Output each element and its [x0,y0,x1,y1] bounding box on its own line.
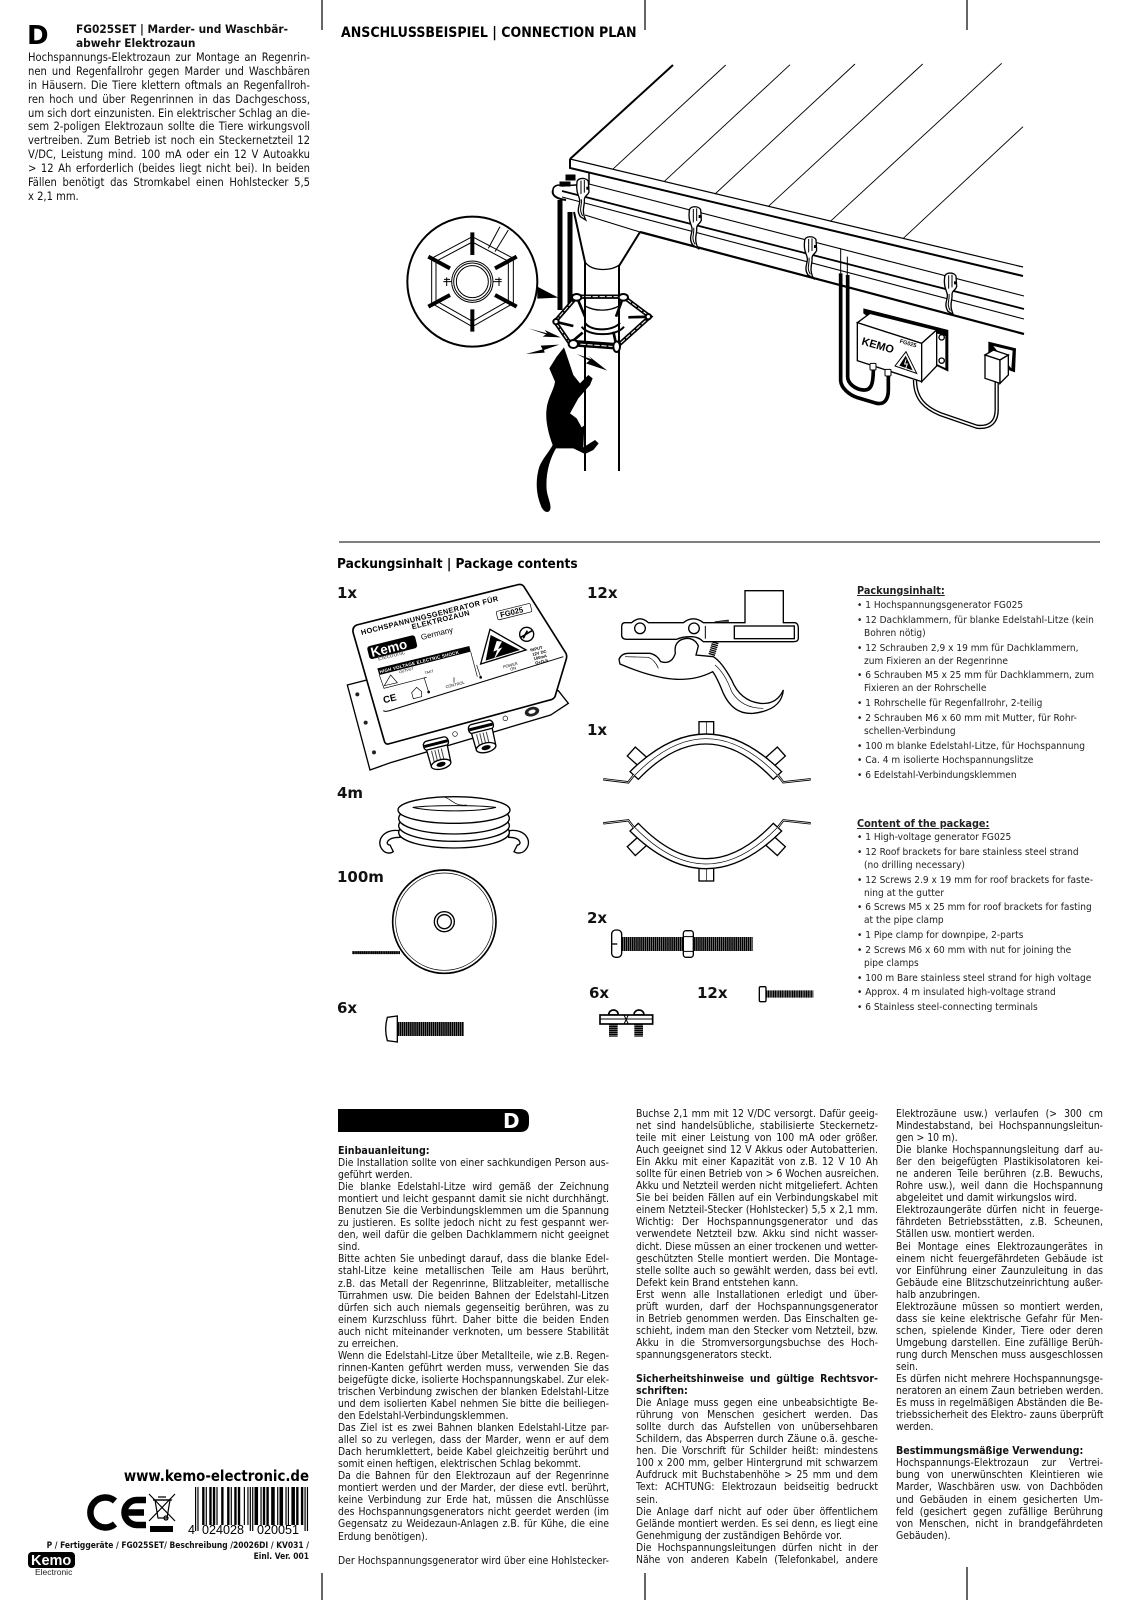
crop marks [322,0,967,1600]
text column 2: power supply and safety notes: prüft wurden, darf der Hochspannungsgenerator [636,1301,878,1313]
footer reference [47,1540,309,1560]
text column 3: safety notes and intended use: Umgebung darstellen. Eine zufällige Berüh- [896,1337,1103,1349]
text column 1: Einbauanleitung: Das Ziel ist es zwei Bahnen blanken Edelstahl-Litze par- [338,1422,609,1434]
box lettering: KEMO [860,336,896,356]
text column 1: Einbauanleitung: des Hochspannungsgenerators nicht geerdet werden (im [338,1506,609,1518]
text column 2: power supply and safety notes: hen. Die Vorschrift für Schilder heißt: mindestens [636,1445,878,1457]
heading: product marker D: D [27,21,49,51]
generator device: HOCHSPANNUNGSGENERATOR FÜR [360,594,500,637]
heading: product title: abwehr Elektrozaun [76,36,195,50]
text column 2: power supply and safety notes: stelle sollte auch so gewählt werden, dass bei evtl. [636,1265,878,1277]
text column 2: power supply and safety notes: Die Anlage darf nicht auf oder über öffentlichem [636,1506,878,1518]
generator device [347,584,568,772]
generator device: FG025 [499,605,525,620]
text column 1: Einbauanleitung: und dem isolierten Kabel nehmen Sie bitte die beiliegen- [338,1398,609,1410]
generator device: TAKT [424,669,435,675]
list: Packungsinhalt (German): schellen-Verbindung [864,726,956,737]
text column 3: safety notes and intended use: Elektrozäune usw.) verlaufen (> 300 cm [896,1108,1103,1120]
generator device: Germany [420,625,454,642]
text column 1: Einbauanleitung: z.B. das Metall der Regenrinne, Blitzableiter, metallische [338,1278,609,1290]
list: Content of the package (English): Content of the package: [857,817,989,830]
text column 1: Einbauanleitung: Bitte achten Sie unbedingt darauf, dass die blanke Edel- [338,1253,609,1265]
barcode [188,1487,308,1537]
detail circle [407,217,558,347]
text column 2: power supply and safety notes: net sind handelsübliche, stabilisierte Steckernetz- [636,1120,878,1132]
text column 3: safety notes and intended use: bung von unerwünschten Kleintieren wie [896,1469,1103,1481]
text column 3: safety notes and intended use: halb anzubringen. [896,1289,980,1301]
text column 3: safety notes and intended use: schen, spielende Kinder, Tiere oder deren [896,1325,1103,1337]
barcode: 4 [188,1523,195,1537]
text column 3: safety notes and intended use: einem nicht feuergefährdeten Gebäude ist [896,1253,1103,1265]
Kemo logo: Electronic [35,1567,73,1577]
text column 3: safety notes and intended use: Es muss in regelmäßigen Abständen die Be- [896,1397,1103,1409]
quantity labels: 1x [337,584,357,602]
screw M6 with nut [612,930,753,957]
list: Content of the package (English): • 2 Screws M6 x 60 mm with nut for joining the [857,945,1071,956]
list: Packungsinhalt (German): • 12 Dachklammern, für blanke Edelstahl-Litze (kein [857,615,1094,626]
text column 1: Einbauanleitung: den, weil dafür die gelben Dachklammern nicht geeignet [338,1229,609,1241]
text column 3: safety notes and intended use: Rohre usw.), weil dann die Hochspannung [896,1180,1103,1192]
text column 1: Einbauanleitung: montiert und leicht gespannt damit sie nicht durchhängt. [338,1193,609,1205]
Kemo logo [28,1552,75,1577]
list: Packungsinhalt (German): Packungsinhalt: [857,584,945,597]
text column 3: safety notes and intended use: neratoren an einem Zaun betrieben werden. [896,1385,1103,1397]
generator device: CE [382,692,398,706]
list: Content of the package (English): • 6 Stainless steel-connecting terminals [857,1002,1038,1013]
text column 2: power supply and safety notes: Auch geeignet sind 12 V Akkus oder Autobatterien. [636,1144,878,1156]
heading: product title: FG025SET | Marder- und Waschbär- [76,22,288,36]
list: Packungsinhalt (German): • 6 Edelstahl-Verbindungsklemmen [857,770,1017,781]
text block: product description: V/DC, Leistung mind. 100 mA oder ein 12 V Autoakku [28,148,310,161]
list: Packungsinhalt (German): • 12 Schrauben 2,9 x 19 mm für Dachklammern, [857,643,1078,654]
text column 2: power supply and safety notes: Die Hochspannungsleitungen dürfen nicht in der [636,1542,878,1554]
text column 2: power supply and safety notes: sein. [636,1494,658,1506]
text column 3: safety notes and intended use: Bestimmungsmäßige Verwendung: [896,1445,1083,1457]
list: Packungsinhalt (German): zum Fixieren an der Regenrinne [864,656,1008,667]
text block: product description: in Häusern. Die Tiere klettern oftmals an Regenfallroh- [28,79,310,92]
text column 1: Einbauanleitung: allel so zu verlegen, dass der Marder, wenn er auf dem [338,1434,609,1446]
text column 1: Einbauanleitung: trischen Verbindung zwischen der blanken Edelstahl-Litze [338,1386,609,1398]
footer reference: Einl. Ver. 001 [254,1550,309,1560]
text column 1: Einbauanleitung: Türrahmen usw. Die beiden Bahnen der Edelstahl-Litzen [338,1290,609,1302]
text block: product description: Hochspannungs-Elektrozaun zur Montage an Regenrin- [28,51,310,64]
text column 2: power supply and safety notes: schieht, indem man den Stecker vom Netzteil, bzw. [636,1325,878,1337]
panel: package contents drawings [347,584,813,1042]
text column 1: Einbauanleitung: montiert werden und der Marder, der diese evtl. berührt, [338,1482,609,1494]
text column 3: safety notes and intended use: sein. [896,1361,918,1373]
text column 2: power supply and safety notes: sollte für einen Betrieb von > 6 Wochen ausreichen. [636,1168,879,1180]
quantity labels: 12x [697,984,728,1002]
text column 2: power supply and safety notes: Nähe von anderen Kabeln (Telefonkabel, andere [636,1554,878,1566]
pipe clamp upper half [603,722,811,782]
text column 2: power supply and safety notes: sollte durch das Aufstellen von unübersehbaren [636,1421,878,1433]
WEEE symbol [149,1494,175,1532]
quantity labels: 4m [337,784,363,802]
text column 2: power supply and safety notes: einem Netzteil-Stecker (Hohlstecker) 5,5 x 2,1 mm. [636,1204,878,1216]
text column 3: safety notes and intended use: abgeleitet und damit wirkungslos wird. [896,1192,1077,1204]
generator device: HIGH VOLTAGE ELECTRIC SHOCK [379,650,460,674]
list: Content of the package (English): • 1 High-voltage generator FG025 [857,832,1011,843]
text column 3: safety notes and intended use: feld (gesichert gegen zufällige Berührung [896,1506,1103,1518]
text column 3: safety notes and intended use: triebssicherheit des Elektro- zauns überprüft [896,1409,1104,1421]
text column 1: Einbauanleitung: beigefügte dicke, isolierte Hochspannungskabel. Zur elek- [338,1374,609,1386]
text block: product description: Fällen benötigt das Stromkabel einen Hohlstecker 5,5 [28,176,310,189]
generator device: 100mA [533,653,547,661]
quantity labels: 2x [587,909,607,927]
list: Content of the package (English): pipe clamps [864,958,919,969]
text column 1: Einbauanleitung: Einbauanleitung: [338,1145,430,1157]
text column 1: Einbauanleitung: dürfen sich auch niemals gegenseitig berühren, was zu [338,1302,609,1314]
footer reference: P / Fertiggeräte / FG025SET/ Beschreibung /20026DI / KV031 / [47,1540,309,1550]
roof bracket [619,591,798,713]
text column 1: Einbauanleitung: zu justieren. Es sollte jedoch nicht zu fest gespannt wer- [338,1217,609,1229]
text column 3: safety notes and intended use: Elektrozaungeräte dürfen nicht in feuerge- [896,1204,1103,1216]
list: Content of the package (English): • 12 Roof brackets for bare stainless steel strand [857,847,1079,858]
generator device: INPUT [530,645,543,653]
list: Packungsinhalt (German): • 6 Schrauben M5 x 25 mm für Dachklammern, zum [857,670,1094,681]
website URL: www.kemo-electronic.de [124,1468,309,1485]
quantity labels: 6x [589,984,609,1002]
text column 1: Einbauanleitung: Erdung benötigen). [338,1530,428,1542]
list: Packungsinhalt (German): • 1 Rohrschelle für Regenfallrohr, 2-teilig [857,698,1042,709]
text column 1: Einbauanleitung: stahl-Litze keine metallischen Teile am Haus berührt, [338,1265,609,1277]
roof clips [577,178,957,315]
list: Packungsinhalt (German) [857,584,1094,781]
text column 1: Einbauanleitung: Die Installation sollte von einer sachkundigen Person aus- [338,1157,609,1169]
text column 2: power supply and safety notes: verwendete Netzteil bzw. Akku sind nicht wasser- [636,1228,878,1240]
text column 2: power supply and safety notes: Text: ACHTUNG: Elektrozaun beidseitig bedruckt [636,1481,878,1493]
text column 3: safety notes and intended use: Mindestabstand, bei Hochspannungsleitun- [896,1120,1103,1132]
text column 1: Einbauanleitung: einem Kurzschluss führt. Daher bitte die beiden Enden [338,1314,609,1326]
generator device: ELEKTROZAUN [411,608,471,631]
text column 3: safety notes and intended use: Elektrozäune müssen so montiert werden, [896,1301,1103,1313]
barcode: 024028 [202,1523,244,1537]
text column 3: safety notes and intended use: Ställen usw. montiert werden. [896,1228,1035,1240]
text column 3: safety notes and intended use [896,1108,1104,1542]
text column 3: safety notes and intended use: fährdeten Betriebsstätten, z.B. Scheunen, [896,1216,1103,1228]
text block: product description [28,51,310,203]
list: Content of the package (English): ning at the gutter [864,888,944,899]
list: Content of the package (English) [857,817,1093,1013]
illustration: connection plan [407,63,1024,512]
text block: product description: > 12 Ah erforderlich (beides liegt nicht bei). In beiden [28,162,310,175]
stainless steel strand spool [352,870,496,973]
list: Packungsinhalt (German): Bohren nötig) [864,628,926,639]
box lettering [860,336,917,356]
list: Content of the package (English): • 6 Screws M5 x 25 mm for roof brackets for fasting [857,902,1092,913]
insulated strand coil [380,797,528,853]
text column 1: Einbauanleitung: Gegensatz zu Weidezaun-Anlagen z.B. für Kühe, die eine [338,1518,609,1530]
text column 2: power supply and safety notes: Die Anlage muss gegen eine unbeabsichtigte Be- [636,1397,878,1409]
text column 2: power supply and safety notes: Aufdruck mit Buchstabenhöhe > 25 mm und dem [636,1469,878,1481]
text column 3: safety notes and intended use: Bei Montage eines Elektrozaungerätes in [896,1241,1103,1253]
wire frame around the pipe [553,294,651,352]
text column 1: Einbauanleitung: den Edelstahl-Verbindungsklemmen. [338,1410,508,1422]
text column 3: safety notes and intended use: vor Einführung einer Zaunzuleitung in das [896,1265,1103,1277]
text column 3: safety notes and intended use: und Gebäuden in einem gesicherten Um- [896,1494,1103,1506]
text column 2: power supply and safety notes: dicht. Diese müssen an einer trockenen und wetter- [636,1241,878,1253]
generator device: Kemo [369,636,409,660]
text column 1: Einbauanleitung: Wenn die Edelstahl-Litze über Metallteile, wie z.B. Regen- [338,1350,609,1362]
text column 2: power supply and safety notes: geschützten Stelle montiert werden. Die Montage- [636,1253,878,1265]
text block: product description: um sich dort einzunisten. Ein elektrischer Schlag an die- [28,107,310,120]
Kemo logo: Kemo [31,1553,71,1569]
text column 1: Einbauanleitung: auch nicht miteinander verknoten, um bessere Stabilität [338,1326,609,1338]
text column 2: power supply and safety notes: Buchse 2,1 mm mit 12 V/DC versorgt. Dafür geeig- [636,1108,878,1120]
text column 3: safety notes and intended use: gen > 10 m). [896,1132,958,1144]
heading: product title [76,22,288,50]
language tab: D: D [503,1109,520,1133]
text column 1: Einbauanleitung: zu erreichen. [338,1338,399,1350]
text column 1: Einbauanleitung: Die blanke Edelstahl-Litze wird gemäß der Zeichnung [338,1181,609,1193]
barcode: 020051 [257,1523,299,1537]
text column 2: power supply and safety notes: Sicherheitshinweise und gültige Rechtsvor- [636,1373,878,1385]
list: Content of the package (English): • 12 Screws 2.9 x 19 mm for roof brackets for faste- [857,875,1093,886]
text column 3: safety notes and intended use: rung durch Menschen muss ausgeschlossen [896,1349,1103,1361]
text column 2: power supply and safety notes: Akku in die Stromversorgungsbuchse des Hoch- [636,1337,878,1349]
list: Packungsinhalt (German): • 1 Hochspannungsgenerator FG025 [857,600,1023,611]
quantity labels: 100m [337,868,384,886]
text column 1: Einbauanleitung: geführt werden. [338,1169,413,1181]
text column 2: power supply and safety notes: Genehmigung der zuständigen Behörde vor. [636,1530,842,1542]
text column 3: safety notes and intended use: Hochspannungs-Elektrozaun zur Vertrei- [896,1457,1103,1469]
text column 1: Einbauanleitung: Der Hochspannungsgenerator wird über eine Hohlstecker- [338,1555,609,1567]
quantity labels: 12x [587,584,618,602]
roof [570,63,1023,276]
text column 3: safety notes and intended use: dass sie keine elektrische Gefahr für Men- [896,1313,1103,1325]
quantity labels [337,584,728,1017]
downpipe [574,212,640,471]
pipe clamp lower half [603,820,811,881]
text column 1: Einbauanleitung: Dach herumklettert, beide Kabel gleichzeitig berührt und [338,1446,609,1458]
marten silhouette with sparks [526,328,607,512]
list: Packungsinhalt (German): Fixieren an der Rohrschelle [864,683,986,694]
text column 3: safety notes and intended use: Die blanke Hochspannungsleitung darf au- [896,1144,1103,1156]
text column 3: safety notes and intended use: Gebäude eine Blitzschutzeinrichtung außer- [896,1277,1103,1289]
screw M5 x 25 [386,1016,464,1042]
list: Content of the package (English): (no drilling necessary) [864,860,965,871]
list: Packungsinhalt (German): • 100 m blanke Edelstahl-Litze, für Hochspannung [857,741,1085,752]
text column 1: Einbauanleitung: somit einen heftigen, elektrischen Schlag bekommt. [338,1458,581,1470]
text column 1: Einbauanleitung: sind. [338,1241,360,1253]
text column 3: safety notes and intended use: Es dürfen nicht mehrere Hochspannungsge- [896,1373,1103,1385]
connecting terminal [600,1010,653,1037]
text column 2: power supply and safety notes: 100 x 200 mm, gelber Hintergrund mit schwarzem [636,1457,878,1469]
language tab: D [338,1109,529,1133]
gutter [553,172,1024,334]
list: Content of the package (English): • 1 Pipe clamp for downpipe, 2-parts [857,930,1023,941]
generator device: OUTPUT [399,667,415,674]
text column 2: power supply and safety notes: Wichtig: Der Hochspannungsgenerator und das [636,1216,878,1228]
heading: package contents: Packungsinhalt | Package contents [337,556,578,572]
text column 2: power supply and safety notes: Ein Akku mit einer Kapazität von z.B. 12 V 10 Ah [636,1156,878,1168]
list: Content of the package (English): • Approx. 4 m insulated high-voltage strand [857,987,1056,998]
high-voltage wires at the pipe [560,200,570,310]
text column 1: Einbauanleitung: rinnen-Kanten geführt werden muss, verwenden Sie das [338,1362,609,1374]
text block: product description: vertreiben. Zum Betrieb ist noch ein Steckernetzteil 12 [28,134,310,147]
list: Packungsinhalt (German): • 2 Schrauben M6 x 60 mm mit Mutter, für Rohr- [857,713,1077,724]
text column 2: power supply and safety notes: in Betrieb genommen werden. Das Einschalten ge- [636,1313,878,1325]
text column 1: Einbauanleitung [338,1145,609,1567]
text column 2: power supply and safety notes: schriften: [636,1385,688,1397]
text column 2: power supply and safety notes: spannungsgenerators steckt. [636,1349,772,1361]
section divider [339,541,1100,543]
text column 1: Einbauanleitung: Da die Bahnen für den Elektrozaun auf der Regenrinne [338,1470,609,1482]
text column 3: safety notes and intended use: ßer den beigefügten Plastikisolatoren kei- [896,1156,1103,1168]
list: Content of the package (English): • 100 m Bare stainless steel strand for high voltage [857,973,1091,984]
generator device: POWER [502,661,518,669]
text column 1: Einbauanleitung: keine Verbindung zur Erde hat, müssen die Anschlüsse [338,1494,609,1506]
text block: product description: ren hoch und über Regenrinnen in das Dachgeschoss, [28,93,310,106]
text column 2: power supply and safety notes: Schildern, das Absperren durch Zäune o.ä. gesche- [636,1433,878,1445]
quantity labels: 6x [337,999,357,1017]
generator box with cables and plug [841,248,1016,427]
heading: connection plan: ANSCHLUSSBEISPIEL | CONNECTION PLAN [341,25,637,41]
text column 2: power supply and safety notes: Sie bei beiden Fällen auf ein Verbindungskabel mit [636,1192,878,1204]
text column 3: safety notes and intended use: ne anderen Teile berühren (z.B. Bewuchs, [896,1168,1103,1180]
generator device: ON [510,665,517,672]
generator device: CONTROL [445,680,466,689]
generator device: O+O-S [535,658,549,666]
text column 3: safety notes and intended use: Gebäuden). [896,1530,951,1542]
text column 2: power supply and safety notes: Gelände montiert werden. Es sei denn, es liegt eine [636,1518,878,1530]
text column 2: power supply and safety notes: Akku und Netzteil werden nicht mitgeliefert. Achten [636,1180,878,1192]
text column 3: safety notes and intended use: werden. [896,1421,933,1433]
text column 2: power supply and safety notes: Erst wenn alle Installationen erledigt und über- [636,1289,878,1301]
screw 2.9 x 19 [759,987,813,1002]
text column 3: safety notes and intended use: Marder, Waschbären usw. von Dachböden [896,1481,1103,1493]
list: Packungsinhalt (German): • Ca. 4 m isolierte Hochspannungslitze [857,755,1033,766]
text column 1: Einbauanleitung: Benutzen Sie die Verbindungsklemmen um die Spannung [338,1205,609,1217]
text column 2: power supply and safety notes [636,1108,879,1566]
quantity labels: 1x [587,721,607,739]
text column 2: power supply and safety notes: rührung von Menschen gesichert werden. Das [636,1409,878,1421]
box lettering: FG025 [899,339,917,349]
text column 3: safety notes and intended use: von Menschen, nicht in brandgefährdeten [896,1518,1103,1530]
text block: product description: sem 2-poligen Elektrozaun sollte die Tiere wirkungsvoll [28,120,310,133]
text block: product description: x 2,1 mm. [28,190,79,203]
text column 2: power supply and safety notes: teile mit einer Leistung von 100 mA oder größer. [636,1132,878,1144]
list: Content of the package (English): at the pipe clamp [864,915,944,926]
generator device: 12V DC [532,649,547,657]
text block: product description: nen und Regenfallrohr gegen Marder und Waschbären [28,65,310,78]
CE mark [90,1498,146,1528]
text column 2: power supply and safety notes: Defekt kein Brand entstehen kann. [636,1277,798,1289]
generator device: Electronic [377,649,406,663]
